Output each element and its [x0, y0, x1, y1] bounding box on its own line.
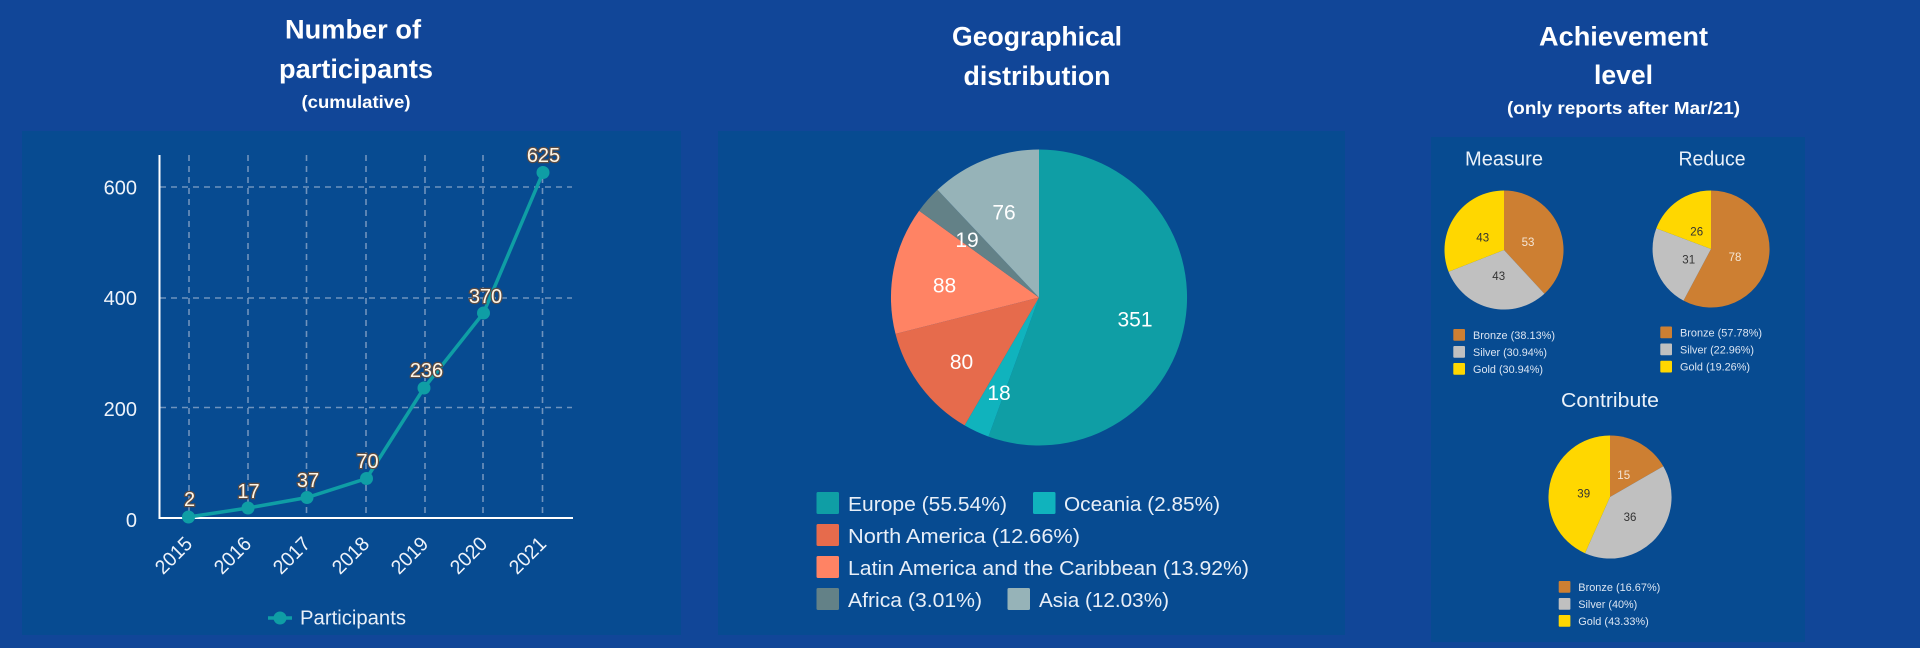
data line: participants: [182, 166, 550, 524]
legend: regions: Asia (12.03%): [1039, 590, 1169, 612]
legend: contribute: Silver (40%): [1578, 599, 1637, 611]
data labels: 236: [410, 360, 443, 382]
pie chart: regions: [891, 149, 1187, 445]
heading: geographical distribution: Geographical: [952, 22, 1122, 52]
pie labels: 19: [955, 229, 979, 252]
chart: contribute: Contribute: [1561, 390, 1659, 412]
chart: reduce: 78: [1729, 252, 1741, 264]
panel: geographical distribution: [718, 131, 1345, 635]
legend: regions: Latin America and the Caribbean (13.92%): [848, 558, 1249, 580]
x axis labels: 2019: [387, 533, 433, 579]
chart: contribute: 36: [1624, 512, 1636, 524]
chart: reduce: Reduce: [1678, 148, 1746, 170]
data labels: 2: [184, 489, 195, 511]
chart: reduce: 31: [1682, 254, 1695, 266]
pie labels: 88: [933, 274, 956, 298]
data labels: 370: [469, 286, 502, 308]
pie labels: 351: [1117, 308, 1153, 332]
x axis labels: [151, 533, 551, 579]
chart: measure: Measure: [1465, 148, 1543, 170]
heading: number of participants: Number of: [285, 14, 422, 44]
legend: regions: Oceania (2.85%): [1064, 494, 1220, 516]
heading: number of participants: participants: [279, 54, 433, 84]
chart: contribute: [1548, 390, 1672, 628]
x axis labels: 2021: [505, 533, 551, 579]
y axis labels: 400: [104, 288, 137, 310]
heading: achievement level: (only reports after Mar/21): [1507, 98, 1740, 118]
panel: achievement level: [1431, 137, 1805, 642]
pie labels: 80: [950, 351, 973, 374]
legend: regions: Africa (3.01%): [848, 590, 982, 612]
heading: geographical distribution: distribution: [964, 61, 1110, 91]
panel: number of participants: [22, 131, 681, 635]
legend: reduce: [1660, 326, 1762, 374]
legend: regions: [816, 492, 1249, 612]
pie labels: 18: [987, 382, 1011, 405]
x axis labels: 2016: [210, 533, 256, 579]
legend: measure: Bronze (38.13%): [1473, 330, 1555, 342]
data labels: 17: [237, 481, 260, 503]
heading: geographical distribution: [952, 22, 1122, 91]
chart: contribute: 15: [1617, 470, 1630, 482]
data labels: 70: [356, 451, 379, 473]
data labels: 37: [297, 470, 319, 492]
heading: achievement level: Achievement: [1539, 22, 1708, 52]
y axis labels: 0: [126, 510, 137, 532]
chart: measure: 43: [1476, 232, 1489, 244]
legend: measure: [1453, 329, 1555, 376]
x axis labels: 2018: [328, 533, 374, 579]
data labels: 625: [527, 145, 560, 167]
y axis labels: [104, 178, 137, 532]
axes: [160, 155, 573, 518]
pie labels: 76: [992, 202, 1016, 224]
chart: contribute: 39: [1577, 488, 1590, 500]
legend: measure: Silver (30.94%): [1473, 347, 1547, 359]
heading: achievement level: level: [1594, 60, 1653, 90]
line chart: [104, 145, 573, 630]
legend: reduce: Gold (19.26%): [1680, 362, 1750, 374]
legend: regions: North America (12.66%): [848, 526, 1080, 548]
pie labels: [933, 202, 1153, 405]
x axis labels: 2017: [269, 533, 315, 579]
chart: measure: 53: [1522, 237, 1534, 249]
legend: reduce: Silver (22.96%): [1680, 344, 1754, 356]
legend: measure: Gold (30.94%): [1473, 364, 1543, 376]
heading: achievement level: [1507, 22, 1740, 118]
legend: regions: Europe (55.54%): [848, 494, 1007, 516]
x axis labels: 2020: [446, 533, 492, 579]
legend: contribute: Gold (43.33%): [1578, 616, 1649, 628]
chart: reduce: [1653, 148, 1770, 374]
legend: reduce: Bronze (57.78%): [1680, 328, 1762, 340]
y axis labels: 200: [104, 399, 137, 421]
data labels: [184, 145, 560, 511]
chart: reduce: 26: [1690, 226, 1703, 238]
y axis labels: 600: [104, 178, 137, 200]
heading: number of participants: [279, 14, 433, 112]
legend: participants: Participants: [300, 608, 406, 630]
chart: measure: 43: [1492, 271, 1505, 283]
heading: number of participants: (cumulative): [302, 92, 410, 112]
legend: contribute: [1559, 581, 1660, 628]
chart: measure: [1445, 148, 1564, 376]
x axis labels: 2015: [151, 533, 197, 579]
legend: contribute: Bronze (16.67%): [1578, 582, 1660, 594]
